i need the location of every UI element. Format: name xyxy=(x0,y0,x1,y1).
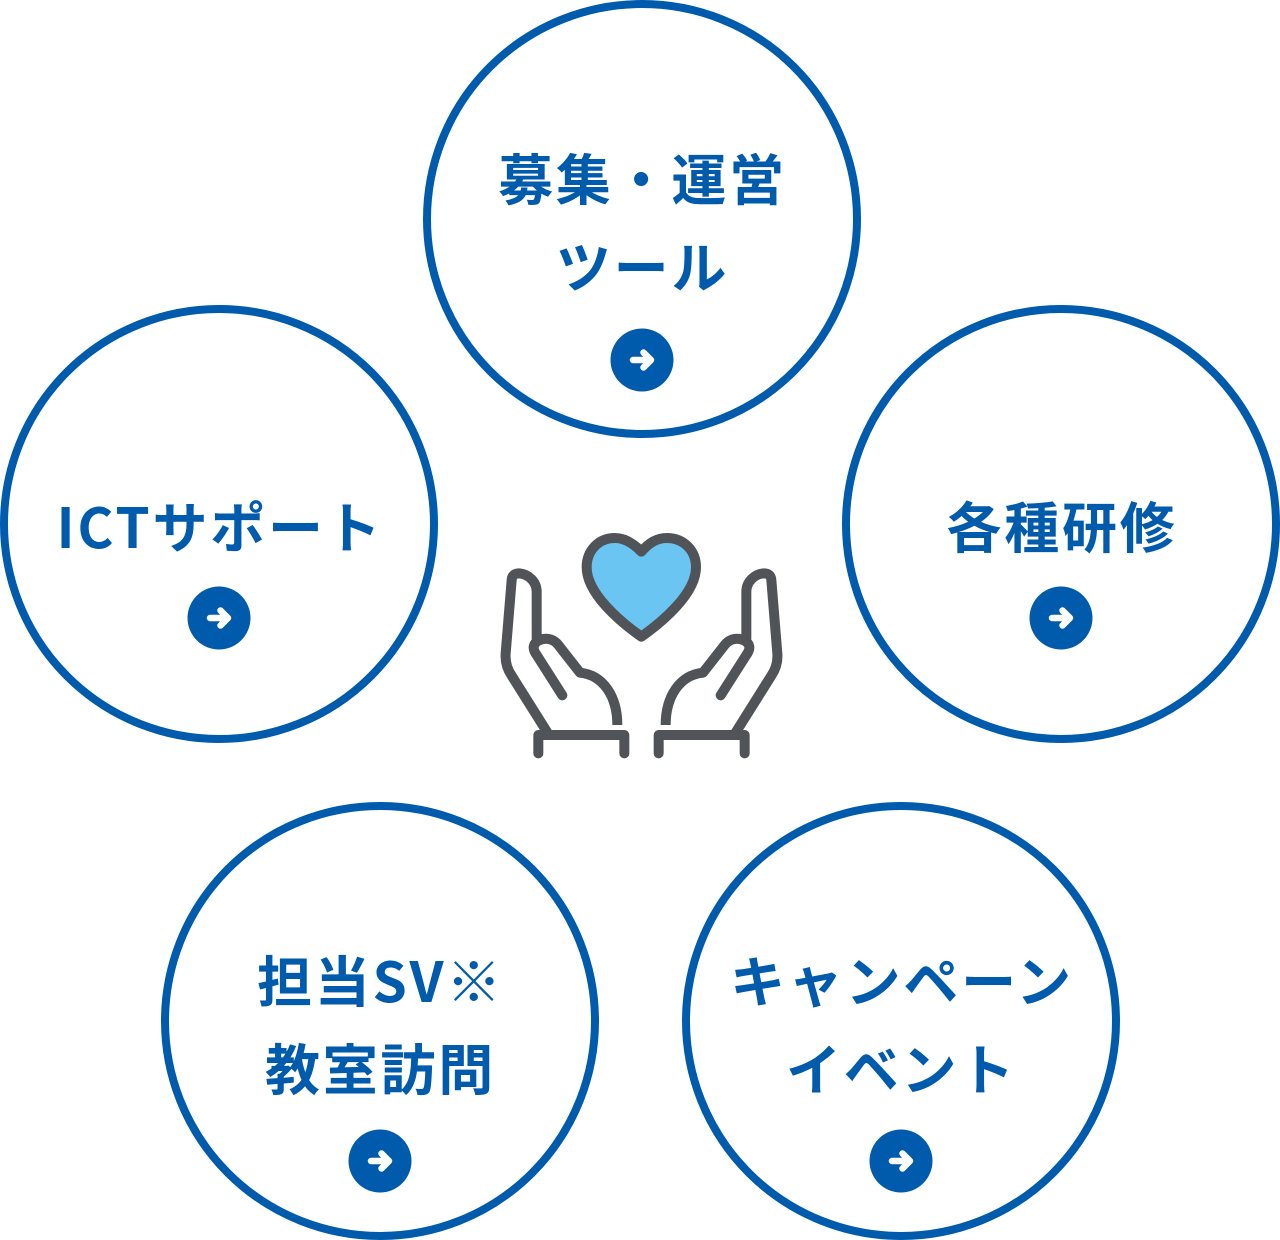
panel: キャンペーンイベント xyxy=(686,806,1116,1236)
panel: 募集・運営ツール xyxy=(427,4,857,434)
icon: arrow button xyxy=(348,1130,412,1192)
icon: arrow button xyxy=(870,1130,932,1192)
panel: 各種研修 xyxy=(846,309,1276,739)
heading: ICTサポート: ICTサポート xyxy=(57,484,383,564)
panel: 担当SV※教室訪問 xyxy=(165,806,595,1236)
icon: left hand xyxy=(506,573,624,753)
heading: 担当SV※: 担当SV※ xyxy=(257,938,504,1018)
icon: arrow button xyxy=(1030,586,1092,650)
icon: arrow button xyxy=(610,328,674,392)
panel: ICTサポート xyxy=(4,309,434,739)
icon: hands holding a heart xyxy=(506,538,777,753)
heading: ツール: ツール xyxy=(556,224,729,304)
icon: heart xyxy=(587,538,696,637)
heading: 募集・運営: 募集・運営 xyxy=(498,136,787,216)
icon: arrow button xyxy=(188,586,250,650)
heading: キャンペーン: キャンペーン xyxy=(730,938,1074,1018)
heading: 各種研修: 各種研修 xyxy=(946,484,1178,564)
heading: 教室訪問: 教室訪問 xyxy=(265,1026,496,1106)
heading: イベント: イベント xyxy=(786,1026,1017,1106)
icon: right hand xyxy=(659,573,777,753)
